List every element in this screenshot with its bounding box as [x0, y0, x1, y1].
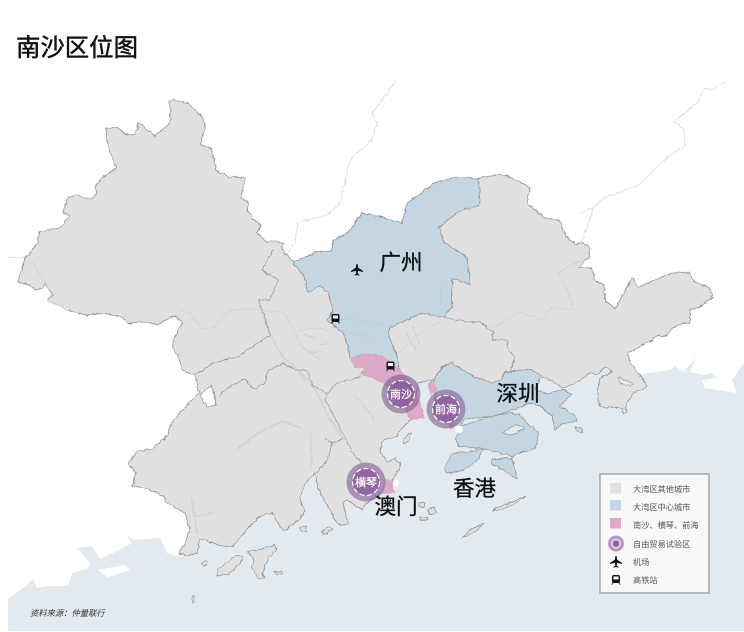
city label: Macau: 澳门 — [374, 495, 418, 519]
region: Hengqin pink — [382, 479, 395, 494]
white enclave on the western border — [200, 386, 216, 407]
source note: 资料来源：仲量联行 — [30, 608, 106, 618]
legend icon: airport: 机场 — [633, 557, 649, 567]
rivers — [27, 257, 582, 533]
marker: Nansha free trade zone — [382, 374, 420, 414]
land: other bay area cities — [18, 100, 713, 556]
marker: Hengqin free trade zone — [346, 462, 386, 502]
city label: Hong Kong: 香港 — [453, 477, 497, 501]
legend marker: free trade zone: 自由贸易试验区 — [633, 539, 690, 549]
city label: Guangzhou: 广州 — [380, 251, 423, 275]
coastal islands — [192, 433, 525, 602]
white spots — [393, 425, 463, 486]
marker: Hengqin free trade zone: 横琴 — [355, 475, 377, 489]
legend swatch: other cities: 大湾区其他城市 — [633, 484, 690, 494]
marker: Nansha free trade zone: 南沙 — [390, 388, 412, 401]
Guangzhou waterways — [340, 285, 442, 338]
icon: high-speed rail station Nansha — [386, 362, 394, 371]
marker: Qianhai free trade zone — [426, 390, 466, 428]
legend — [600, 474, 709, 593]
icon: Guangzhou airport — [351, 264, 363, 276]
region: Nansha pink — [350, 354, 425, 420]
legend icon: high-speed rail: 高铁站 — [633, 575, 658, 585]
legend swatch: core cities: 大湾区中心城市 — [633, 502, 690, 512]
sea — [8, 357, 744, 631]
region: Hong Kong — [444, 413, 583, 479]
outside boundary lines — [8, 80, 724, 300]
title: 南沙区位图 — [16, 35, 138, 62]
legend swatch: Nansha, Hengqin, Qianhai: 南沙、横琴、前海 — [633, 520, 699, 530]
eastern bay inlet — [618, 378, 633, 386]
internal city boundaries — [195, 250, 515, 473]
base map — [8, 80, 724, 602]
icon: high-speed rail station west — [332, 314, 340, 324]
region: Guangzhou — [293, 178, 480, 373]
region: Shenzhen — [434, 363, 577, 430]
region: Qianhai pink — [428, 379, 458, 430]
white inlet on the west coast — [97, 565, 130, 577]
marker: Qianhai free trade zone: 前海 — [435, 402, 457, 416]
city label: Shenzhen: 深圳 — [496, 382, 540, 406]
